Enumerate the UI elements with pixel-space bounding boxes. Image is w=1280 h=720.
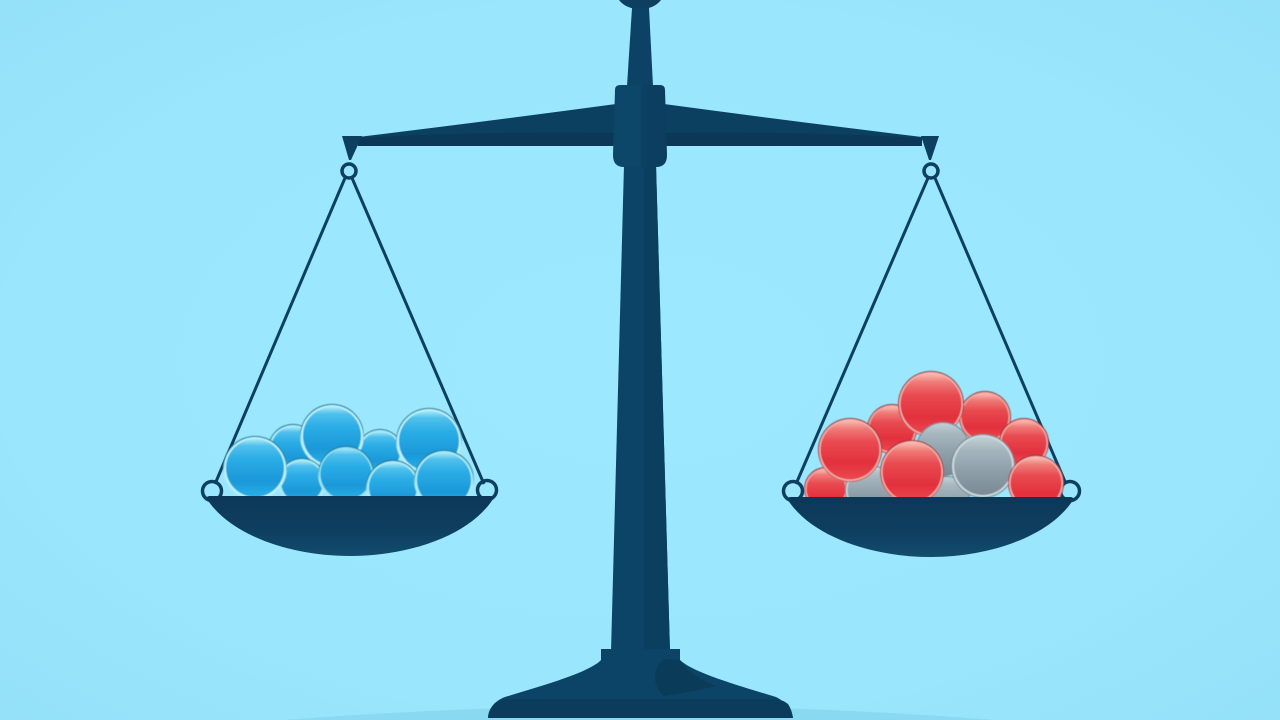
red and grey balls	[803, 370, 1065, 497]
beam	[342, 104, 939, 178]
base collar	[601, 649, 680, 661]
left beam lower band	[358, 133, 616, 146]
base foot	[488, 660, 793, 718]
scale stand	[342, 0, 939, 718]
ground shadow	[285, 706, 995, 720]
left beam hook	[342, 136, 362, 160]
right beam arm	[664, 104, 922, 146]
left pan strings	[215, 178, 484, 484]
right beam lower band	[664, 133, 922, 146]
right hanger ring	[924, 164, 938, 178]
upper post	[627, 8, 653, 86]
left beam arm	[358, 104, 616, 146]
right pan dish	[788, 497, 1073, 557]
left pan assembly	[202, 178, 496, 556]
illustration: balance scale	[200, 0, 1082, 720]
right beam hook	[921, 136, 939, 160]
main post	[611, 165, 670, 652]
base lower band	[488, 699, 793, 718]
base	[488, 649, 793, 718]
right pan strings	[796, 178, 1066, 484]
central hub	[613, 85, 667, 167]
left hanger ring	[342, 164, 356, 178]
top knob	[619, 0, 661, 9]
right pan assembly	[784, 178, 1080, 557]
right pan rings	[784, 482, 1080, 500]
post shaded side	[644, 165, 670, 652]
blue balls	[222, 403, 474, 496]
base shaded patch	[655, 659, 716, 696]
left pan dish	[207, 496, 493, 556]
left pan rings	[202, 480, 496, 500]
